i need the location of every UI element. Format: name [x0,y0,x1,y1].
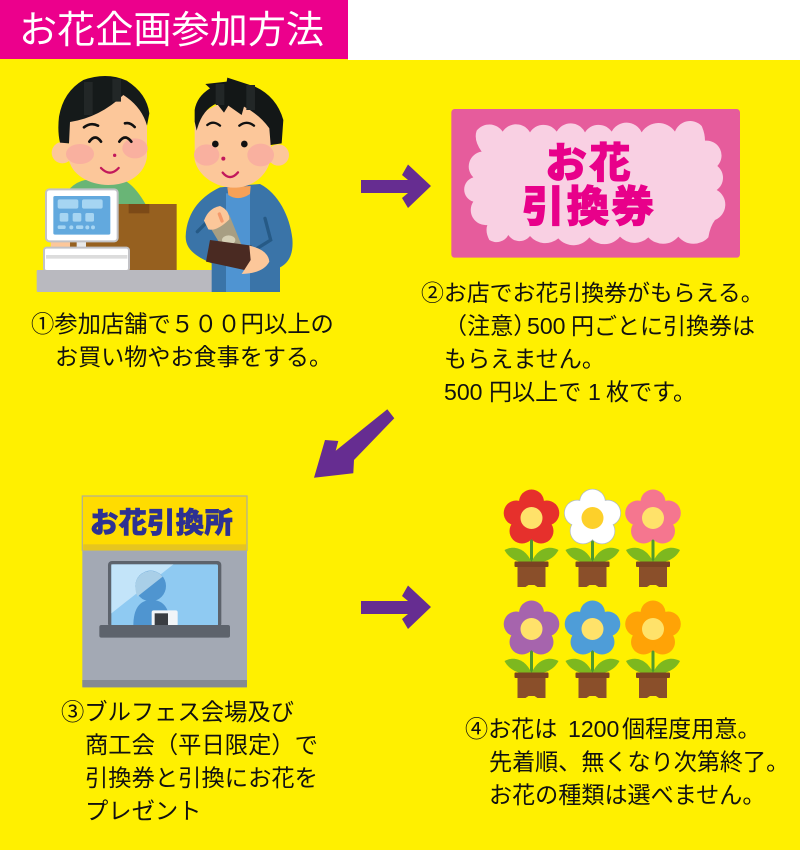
caption: step 4 [465,716,789,808]
caption: step 3: 引換券と引換にお花を [85,765,318,791]
caption: step 1: お買い物やお食事をする。 [55,344,332,370]
illustration: six potted flowers [504,490,681,698]
ticket lettering [522,141,654,232]
caption: step 2: （注意） [444,313,536,339]
arrow: step 1 to step 2 [361,164,431,208]
caption: step 3: プレゼント [85,798,201,824]
title banner [0,0,348,59]
ticket lettering: 引換券 [522,184,654,232]
caption: step 4: お花の種類は選べません。 [489,782,765,808]
arrow: step 3 to step 4 [361,586,431,629]
illustration: flower voucher ticket [451,109,740,258]
booth window [99,561,230,638]
caption: step 2 [421,280,764,405]
illustration: exchange booth [82,496,247,687]
caption: step 2: 円以上で [489,379,581,405]
caption: step 2: ②お店でお花引換券がもらえる。 [421,280,764,306]
caption: step 1 [31,311,334,370]
flower: pink [625,490,681,587]
illustration: shop clerk and customer at register [37,76,293,292]
flower: orange [625,600,681,698]
caption: step 4: ④お花は [465,716,557,742]
flower: white [565,490,620,587]
booth sign lettering: お花引換所 [90,508,233,540]
caption: step 2: 枚です。 [606,379,696,405]
caption: step 2: 500 [527,313,566,339]
caption: step 4: 先着順、無くなり次第終了。 [489,749,789,775]
caption: step 4: 1200 [568,716,619,742]
flower: blue [565,600,620,698]
caption: step 2: もらえません。 [444,346,605,372]
caption: step 3: 商工会（平日限定）で [85,732,318,758]
title banner: お花企画参加方法 [19,10,324,52]
caption: step 2: 円ごとに引換券は [571,313,755,339]
caption: step 3: ③ブルフェス会場及び [61,699,294,725]
flower: red [504,490,559,587]
caption: step 2: 500 [444,379,483,405]
caption: step 3 [61,699,318,824]
flower: purple [504,600,559,698]
caption: step 1: ①参加店舗で５００円以上の [31,311,334,337]
caption: step 4: 個程度用意。 [622,716,761,742]
arrow: step 2 to step 3 [314,409,394,478]
ticket lettering: お花 [545,141,631,187]
caption: step 2: 1 [588,379,601,405]
